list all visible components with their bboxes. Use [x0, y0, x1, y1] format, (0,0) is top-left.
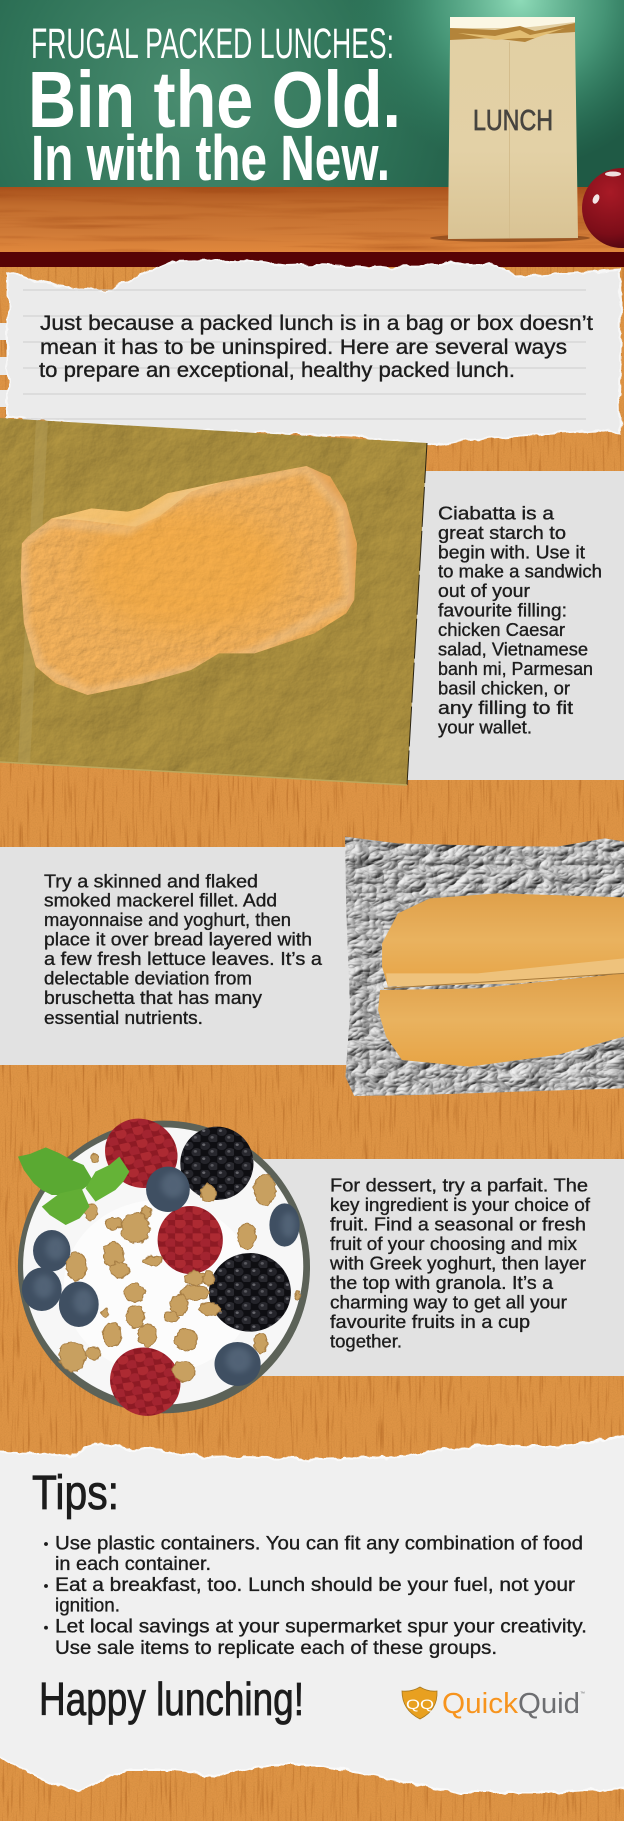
brown paper bag sheet: [0, 418, 427, 785]
ciabatta text: favourite filling:: [438, 600, 567, 621]
icon: shield: [402, 1687, 437, 1719]
chalkboard: [0, 0, 624, 188]
parfait text: charming way to get all your: [330, 1291, 567, 1312]
parfait text: fruit. Find a seasonal or fresh: [330, 1214, 586, 1235]
mackerel text: essential nutrients.: [44, 1007, 203, 1028]
ciabatta text: to make a sandwich: [438, 561, 602, 582]
title: In with the New.: [31, 122, 390, 194]
dark red table edge: [0, 252, 624, 267]
icon: paper lunch bag: [430, 17, 590, 242]
icon: foil with smoked mackerel: [345, 837, 624, 1096]
ciabatta text: [438, 502, 602, 737]
icon: parfait bowl: [18, 1112, 310, 1421]
mackerel text: smoked mackerel fillet. Add: [44, 890, 277, 911]
icon: red apple: [582, 168, 624, 248]
mackerel text: Try a skinned and flaked: [44, 870, 258, 891]
parfait text: [329, 1175, 591, 1351]
fish fillet: [378, 893, 624, 1067]
tips heading: Tips:: [32, 1467, 119, 1520]
foil sheet: [345, 837, 624, 1096]
ciabatta text: great starch to: [438, 522, 566, 543]
happy lunching sign-off: Happy lunching!: [39, 1673, 304, 1725]
raspberries: [96, 1112, 223, 1421]
intro text: Just because a packed lunch is in a bag or box doesn’t: [40, 312, 593, 335]
panel: parfait text: [240, 1159, 624, 1376]
blueberries: [22, 1167, 300, 1386]
mackerel text: place it over bread layered with: [44, 929, 312, 950]
header scene: [0, 0, 624, 267]
mackerel text: delectable deviation from: [44, 968, 252, 988]
parfait text: together.: [330, 1330, 402, 1351]
panel: ciabatta text: [400, 471, 624, 780]
ciabatta text: begin with. Use it: [438, 541, 585, 562]
panel: mackerel text: [0, 847, 352, 1065]
tips list: Eat a breakfast, too. Lunch should be your fuel, not your: [55, 1574, 576, 1596]
mackerel text: [44, 870, 323, 1028]
lunch label: LUNCH: [473, 105, 553, 137]
mackerel text: bruschetta that has many: [44, 987, 263, 1008]
tips list: [44, 1532, 587, 1659]
ciabatta text: your wallet.: [438, 716, 532, 737]
ciabatta text: basil chicken, or: [438, 677, 570, 698]
blueberry bloom: [34, 1172, 296, 1373]
parfait text: the top with granola. It’s a: [330, 1272, 554, 1293]
parfait text: fruit of your choosing and mix: [330, 1233, 578, 1254]
logo: QuickQuid: [402, 1687, 585, 1720]
title: FRUGAL PACKED LUNCHES:: [31, 20, 394, 68]
title: [28, 20, 401, 194]
parfait text: with Greek yoghurt, then layer: [329, 1252, 586, 1274]
ciabatta text: out of your: [438, 580, 530, 601]
ciabatta text: banh mi, Parmesan: [438, 658, 593, 679]
parfait text: For dessert, try a parfait. The: [330, 1175, 588, 1196]
logo: QuickQuid: Quid: [518, 1688, 580, 1720]
logo: QuickQuid: ™: [580, 1691, 585, 1697]
panel: tips torn paper: [0, 1437, 624, 1792]
intro text: to prepare an exceptional, healthy packed lunch.: [39, 359, 515, 382]
ciabatta text: chicken Caesar: [438, 619, 565, 640]
ciabatta text: any filling to fit: [438, 697, 573, 718]
intro text: mean it has to be uninspired. Here are several ways: [40, 336, 567, 359]
glass bowl and yoghurt: [18, 1121, 310, 1413]
mackerel text: a few fresh lettuce leaves. It’s a: [44, 948, 323, 969]
intro text: [39, 312, 593, 382]
ciabatta text: Ciabatta is a: [438, 502, 555, 523]
tips list: Use plastic containers. You can fit any combination of food: [55, 1532, 583, 1554]
icon: ciabatta bread: [21, 466, 357, 695]
title: Bin the Old.: [28, 55, 401, 144]
icon: shield: QQ: [406, 1696, 434, 1712]
mint leaves: [18, 1147, 129, 1225]
panel: intro torn paper: [0, 261, 621, 445]
tips list: Use sale items to replicate each of these groups.: [55, 1637, 497, 1659]
mackerel text: mayonnaise and yoghurt, then: [44, 909, 291, 930]
blackberries: [180, 1127, 291, 1332]
logo: QuickQuid: Quick: [442, 1688, 518, 1720]
table top: [0, 187, 624, 252]
tips list: ignition.: [55, 1595, 120, 1617]
parfait text: favourite fruits in a cup: [330, 1311, 530, 1332]
tips list: in each container.: [55, 1553, 211, 1575]
ciabatta text: salad, Vietnamese: [438, 638, 588, 660]
granola: [59, 1154, 300, 1382]
parfait text: key ingredient is your choice of: [330, 1194, 591, 1215]
tips list: Let local savings at your supermarket spur your creativity.: [55, 1616, 587, 1638]
